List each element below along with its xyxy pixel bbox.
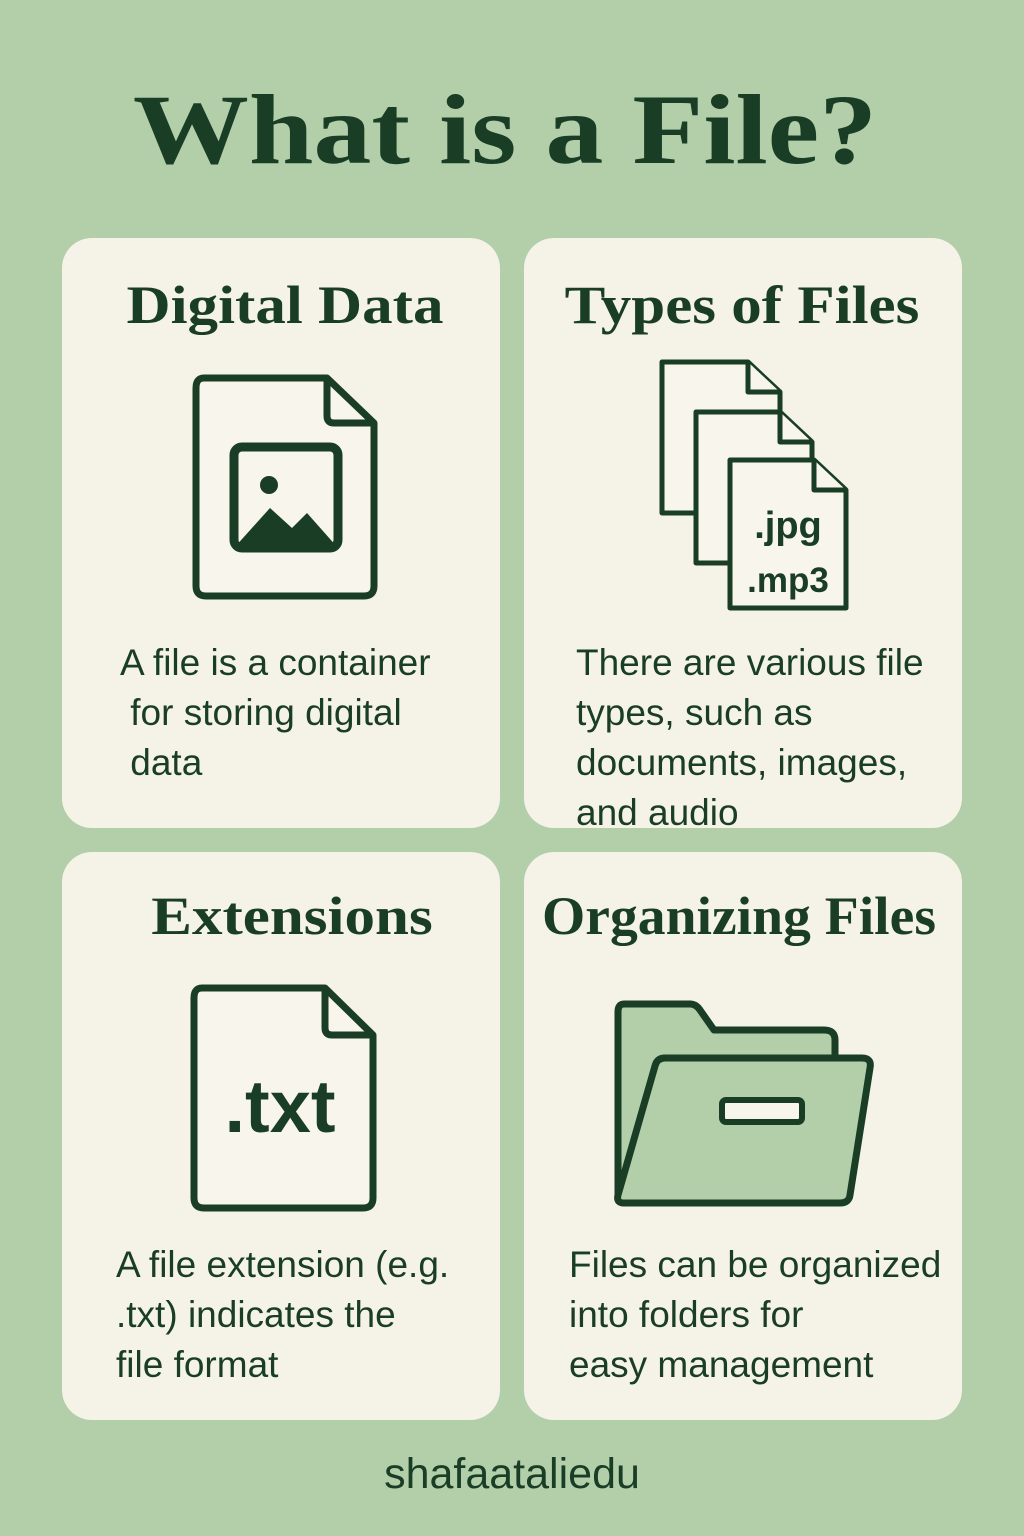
icon: txt file: .txt — [224, 1065, 336, 1148]
panel: types of files — [524, 238, 962, 828]
text: organizing files: Files can be organized — [569, 1244, 941, 1285]
text: digital data: for storing digital — [130, 692, 402, 733]
heading: digital data: Digital Data — [127, 275, 443, 335]
text: types of files: types, such as — [576, 692, 813, 733]
panel: extensions — [62, 852, 500, 1420]
text: organizing files: easy management — [569, 1344, 873, 1385]
text: digital data — [120, 642, 431, 783]
text: organizing files — [569, 1244, 941, 1385]
icon: folder — [614, 1000, 874, 1206]
text: digital data: A file is a container — [120, 642, 431, 683]
text: types of files: and audio — [576, 792, 739, 833]
panel: digital data — [62, 238, 500, 828]
text: types of files: documents, images, — [576, 742, 907, 783]
heading: types of files: Types of Files — [565, 275, 919, 335]
text: organizing files: into folders for — [569, 1294, 803, 1335]
text: extensions: file format — [116, 1344, 278, 1385]
text: types of files — [576, 642, 924, 833]
icon: stacked files — [660, 360, 848, 610]
text: types of files: There are various file — [576, 642, 924, 683]
footer: shafaataliedu — [384, 1450, 640, 1498]
panel: organizing files — [524, 852, 962, 1420]
text: extensions: .txt) indicates the — [116, 1294, 396, 1335]
title: What is a File? — [133, 74, 877, 185]
icon: stacked files: .mp3 — [747, 561, 829, 600]
heading: extensions: Extensions — [151, 886, 433, 946]
icon: stacked files: .jpg — [754, 505, 822, 547]
icon: txt file — [190, 984, 376, 1212]
text: extensions — [116, 1244, 449, 1385]
text: digital data: data — [130, 742, 202, 783]
text: extensions: A file extension (e.g. — [116, 1244, 449, 1285]
heading: organizing files: Organizing Files — [542, 886, 936, 946]
icon: image file — [192, 374, 378, 600]
